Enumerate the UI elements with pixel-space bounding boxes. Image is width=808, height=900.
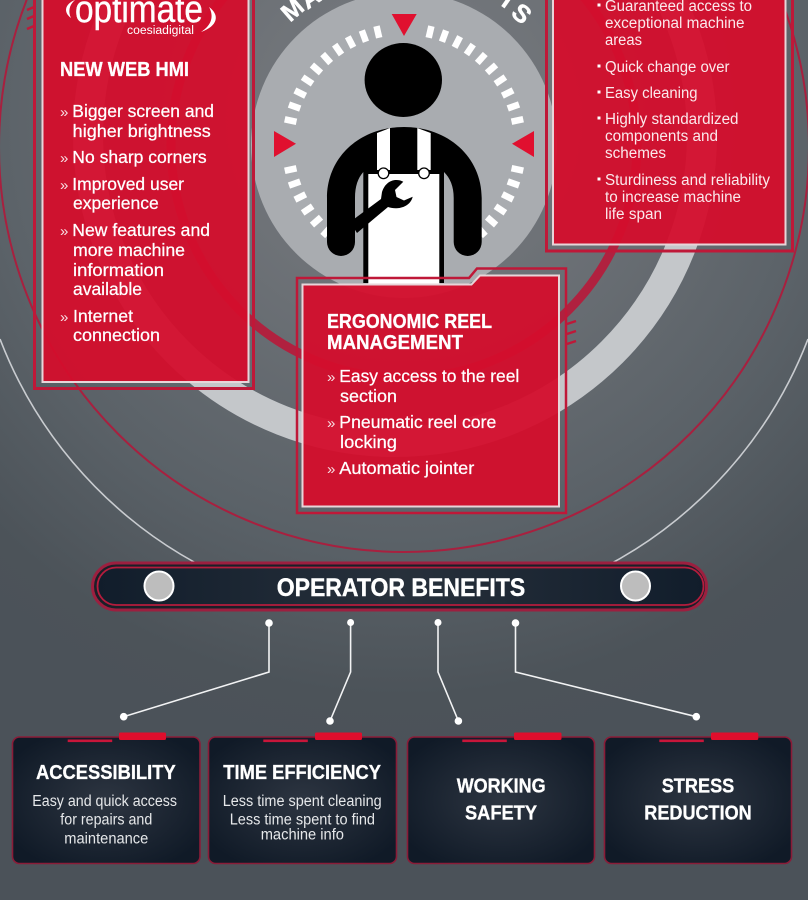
- card: accessibility: Easy and quick access: [32, 793, 177, 810]
- card: working safety: SAFETY: [465, 802, 538, 824]
- card: time efficiency: Less time spent cleaning: [223, 793, 382, 810]
- icon: wrench: [350, 180, 413, 233]
- feature list: [327, 366, 519, 478]
- card: time efficiency: TIME EFFICIENCY: [223, 762, 382, 784]
- feature list: Internet: [73, 306, 133, 326]
- feature list: No sharp corners: [72, 147, 207, 167]
- feature list: higher brightness: [73, 121, 211, 141]
- card: stress reduction: REDUCTION: [644, 802, 752, 824]
- operator benefits banner: [92, 563, 706, 610]
- card: accessibility: ACCESSIBILITY: [36, 762, 176, 784]
- feature list: »: [60, 104, 68, 121]
- feature list: Quick change over: [605, 59, 730, 76]
- feature list: exceptional machine: [605, 15, 744, 32]
- card: accessibility: for repairs and: [60, 811, 152, 828]
- heading: NEW WEB HMI: [60, 59, 189, 81]
- gauge ticks: [284, 25, 524, 238]
- icon: operator with wrench: [327, 43, 482, 284]
- curved heading fragments: [276, 0, 537, 30]
- feature list: Sturdiness and reliability: [605, 172, 770, 189]
- gauge pointers: [274, 14, 534, 157]
- feature list: »: [60, 223, 68, 240]
- feature list: components and: [605, 128, 718, 145]
- feature list: areas: [605, 32, 642, 49]
- heading: MANAGEMENT: [327, 332, 463, 354]
- banner title: OPERATOR BENEFITS: [277, 574, 525, 602]
- feature list: Pneumatic reel core: [339, 412, 496, 432]
- feature list: »: [60, 309, 68, 326]
- card: stress reduction: [604, 732, 792, 864]
- card: time efficiency: machine info: [261, 827, 344, 844]
- feature list: connection: [73, 325, 160, 345]
- banner knob left: [144, 572, 174, 600]
- feature bullets: [598, 4, 600, 180]
- feature list: Easy cleaning: [605, 85, 698, 102]
- card: working safety: WORKING: [457, 775, 546, 797]
- feature list: more machine: [73, 240, 185, 260]
- feature list: available: [73, 279, 142, 299]
- logo: coesiadigital: [127, 25, 194, 37]
- frame ticks: [567, 321, 576, 344]
- feature list: »: [327, 415, 335, 432]
- feature list: Highly standardized: [605, 111, 738, 128]
- feature list: schemes: [605, 145, 666, 162]
- connector lines: [120, 619, 700, 725]
- card: accessibility: maintenance: [64, 830, 148, 847]
- central gauge disc: [251, 0, 557, 298]
- feature list: life span: [605, 206, 662, 223]
- feature list: Easy access to the reel: [339, 366, 519, 386]
- panel: new web hmi: [27, 0, 254, 388]
- feature list: section: [340, 386, 397, 406]
- heading: ERGONOMIC REEL: [327, 311, 492, 333]
- feature list: information: [73, 260, 164, 280]
- feature list: »: [327, 369, 335, 386]
- feature list: Bigger screen and: [72, 101, 214, 121]
- feature list: »: [327, 461, 335, 478]
- card: stress reduction: STRESS: [662, 775, 734, 797]
- feature list: Improved user: [72, 174, 184, 194]
- card: accessibility: [12, 732, 200, 864]
- card: working safety: [408, 732, 594, 864]
- feature list: [605, 0, 770, 223]
- feature list: locking: [340, 432, 397, 452]
- card: time efficiency: [208, 732, 396, 864]
- frame ticks: [27, 7, 34, 29]
- feature list: [60, 101, 214, 345]
- card: time efficiency: Less time spent to find: [230, 811, 375, 828]
- feature list: experience: [73, 193, 159, 213]
- feature list: New features and: [72, 220, 210, 240]
- heading: [327, 311, 492, 354]
- feature list: »: [60, 177, 68, 194]
- background rings: [0, 0, 808, 584]
- panel: machine features: [546, 0, 792, 251]
- feature list: Automatic jointer: [339, 458, 474, 478]
- feature list: »: [60, 150, 68, 167]
- panel: ergonomic reel management: [297, 268, 576, 513]
- banner knob right: [621, 572, 650, 600]
- feature list: to increase machine: [605, 189, 741, 206]
